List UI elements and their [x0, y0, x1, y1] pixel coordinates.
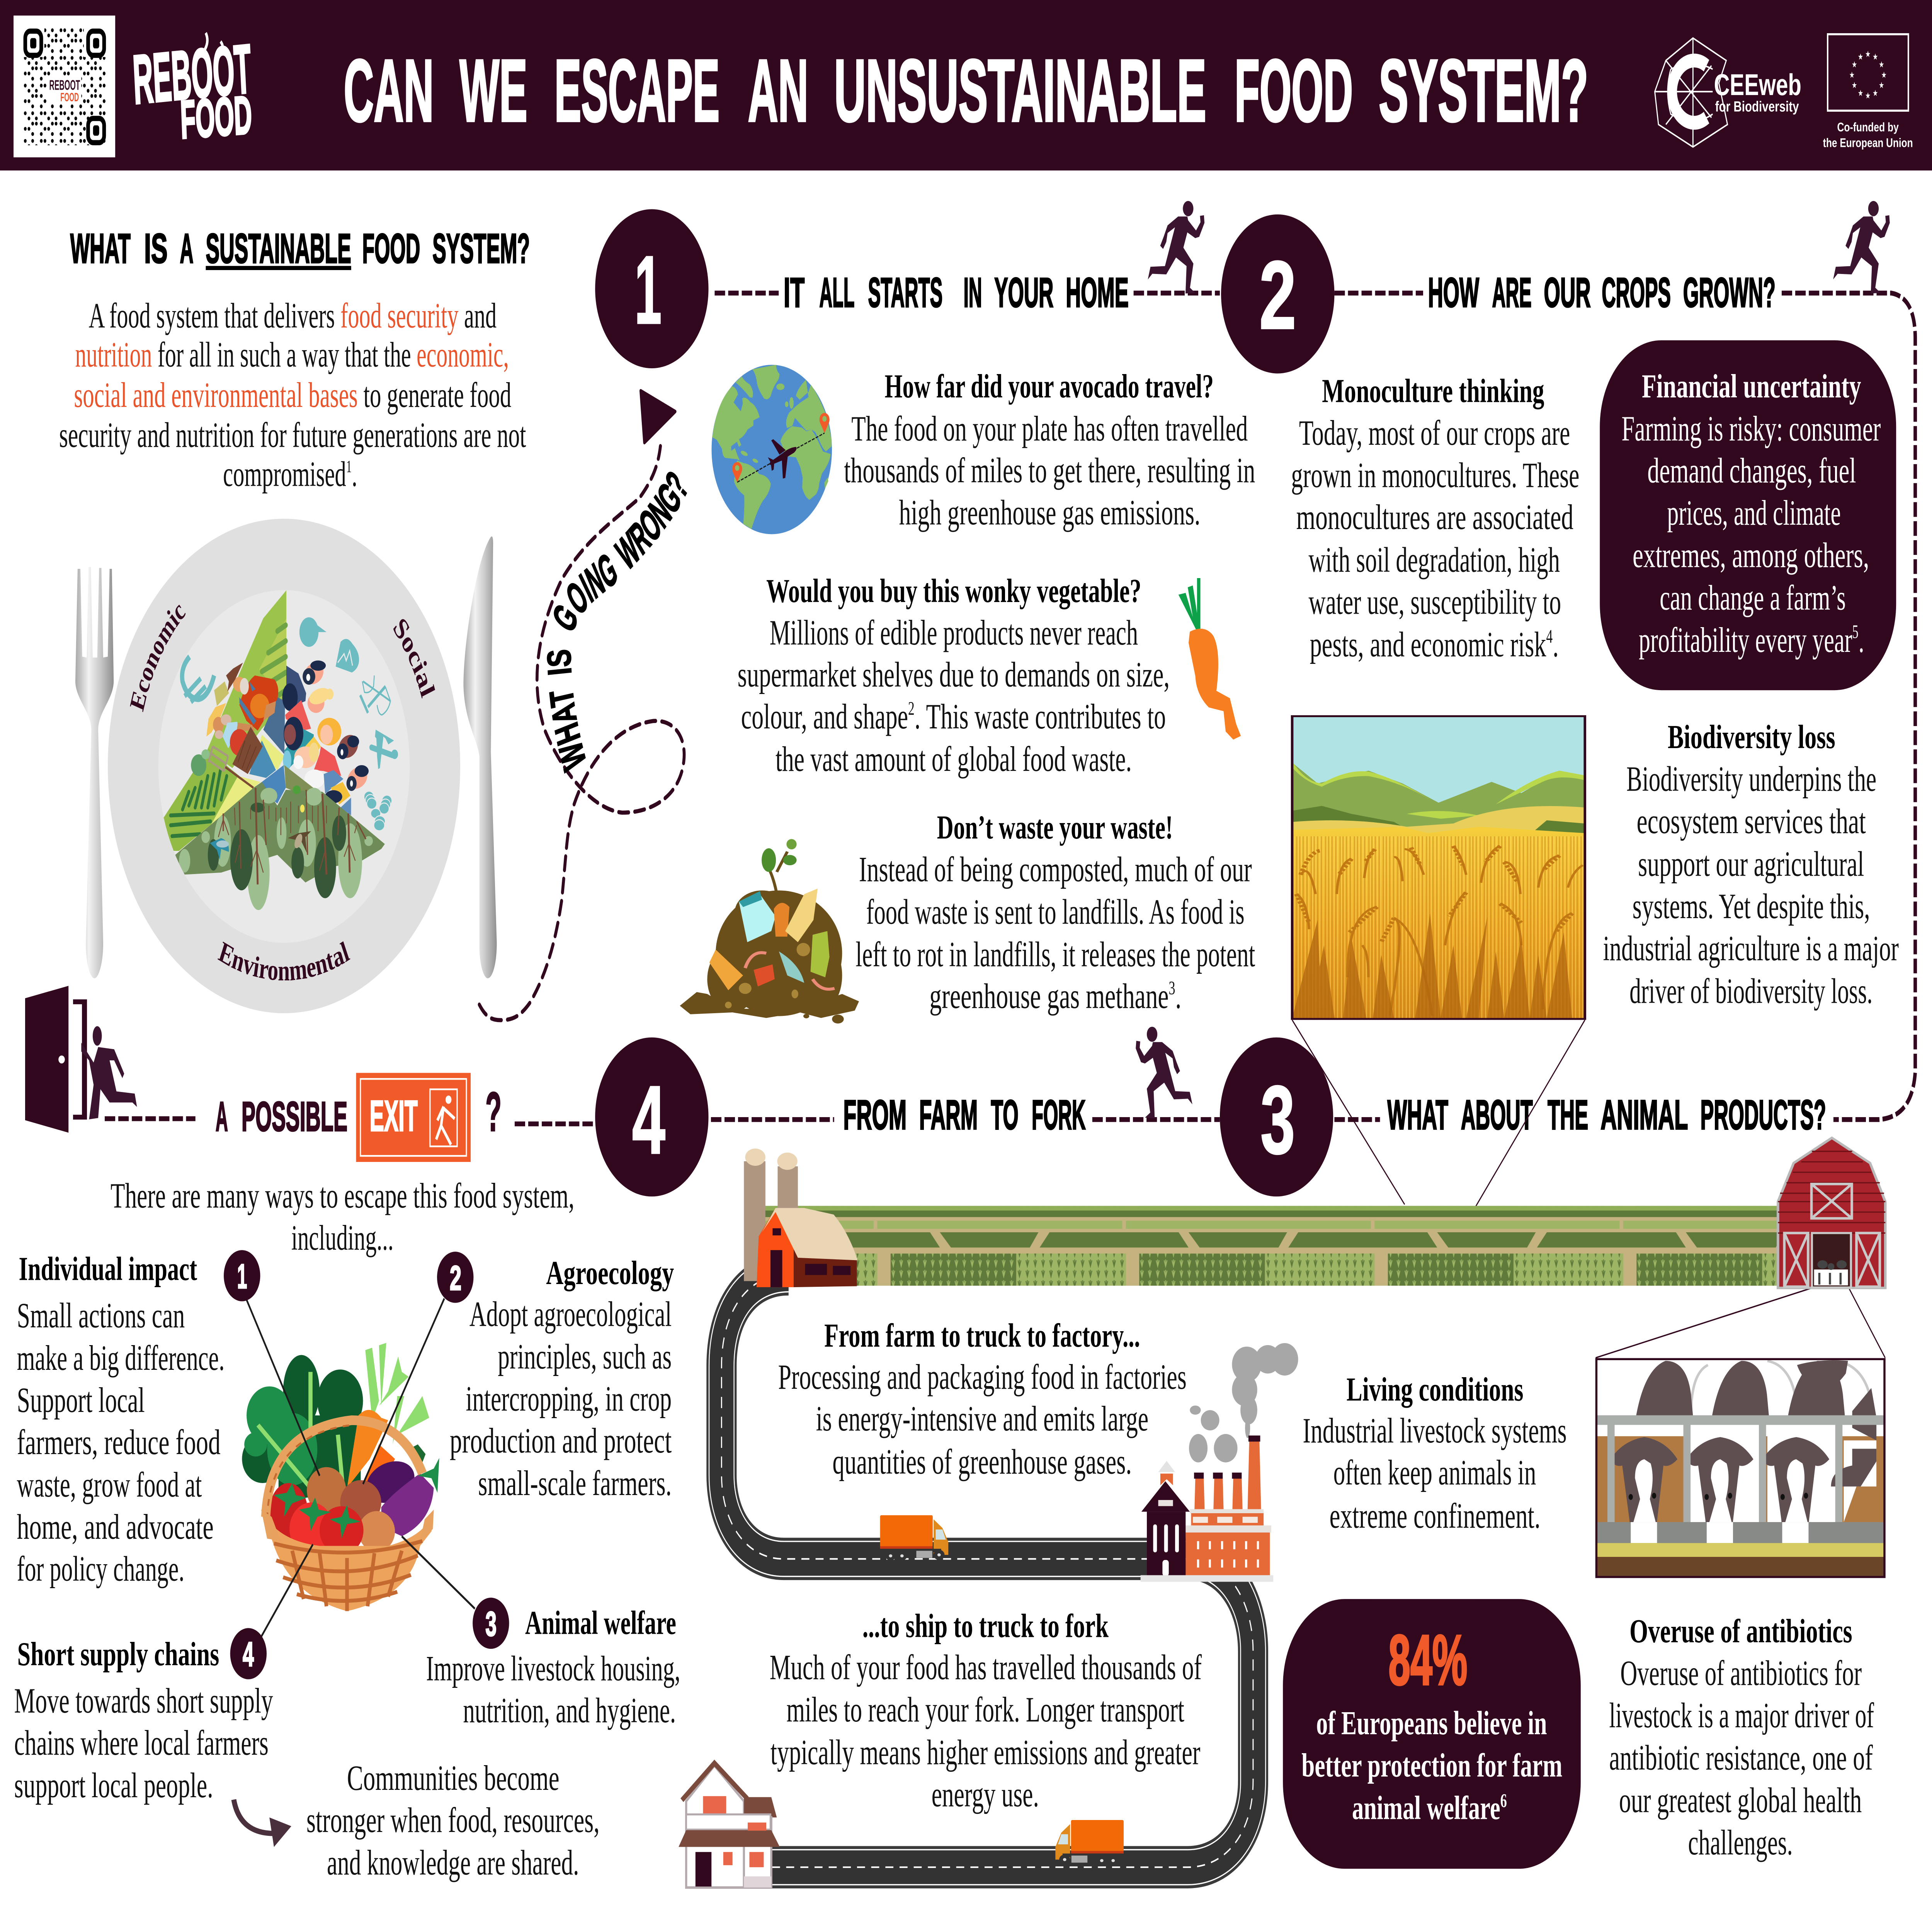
icon: wonky carrot: [1179, 578, 1241, 740]
panel: financial uncertainty: Farming is risky: consumer: [1621, 410, 1881, 449]
panel: 84 percent statistic: [1283, 1599, 1581, 1869]
heading: what about the animal products: PRODUCTS?: [1701, 1092, 1826, 1138]
panel: financial uncertainty: .: [1859, 621, 1864, 660]
exit sign: [356, 1073, 471, 1162]
badge 4: 4: [243, 1635, 254, 1674]
wonky vegetable text block: Millions of edible products never reach: [770, 614, 1138, 653]
living conditions text block: extreme confinement.: [1330, 1497, 1541, 1536]
heading: how are our crops grown: [1428, 270, 1776, 316]
panel: 84 percent statistic: animal welfare: [1352, 1789, 1504, 1827]
badge 2: 2: [450, 1259, 461, 1298]
biodiversity text block: ecosystem services that: [1637, 802, 1866, 841]
waste text block: Instead of being composted, much of our: [859, 850, 1252, 889]
individual impact block: make a big difference.: [17, 1339, 224, 1378]
definition paragraph: security and nutrition for future generations are not: [59, 416, 526, 455]
heading: how are our crops grown: GROWN?: [1683, 270, 1776, 316]
CEEweb logo: CEEweb: [1714, 68, 1801, 102]
illustration: factory: [1141, 1343, 1298, 1582]
heading: a possible exit: POSSIBLE: [242, 1094, 347, 1140]
biodiversity text block: Biodiversity loss: [1668, 718, 1835, 756]
heading: a possible exit: ?: [485, 1081, 502, 1143]
plate with sustainability pillars: Social: [388, 611, 439, 701]
heading: what about the animal products: THE: [1548, 1092, 1588, 1138]
fork: [75, 567, 114, 978]
definition paragraph: nutrition for all in such a way that the economic,: [75, 335, 509, 374]
heading: it all starts in your home: IN: [964, 270, 982, 316]
antibiotics text block: livestock is a major driver of: [1609, 1696, 1874, 1735]
wonky vegetable text block: Would you buy this wonky vegetable?: [766, 572, 1141, 610]
runner three: [1136, 1027, 1192, 1118]
monoculture text block: grown in monocultures. These: [1291, 456, 1579, 495]
step 3 circle: [1220, 1038, 1333, 1196]
ship to truck to fork text block: miles to reach your fork. Longer transport: [786, 1690, 1184, 1730]
biodiversity text block: [1603, 718, 1899, 1011]
Reboot Food logo: [131, 30, 253, 150]
panel: financial uncertainty: Financial uncertainty: [1642, 367, 1861, 405]
badge 4: [230, 1628, 267, 1679]
panel: financial uncertainty: profitability every year: [1639, 621, 1872, 660]
agroecology block: [450, 1254, 674, 1503]
wonky vegetable text block: . This waste contributes to: [915, 697, 1166, 737]
heading: from farm to fork: FORK: [1032, 1092, 1086, 1138]
heading: what about the animal products: WHAT: [1388, 1092, 1448, 1138]
biodiversity text block: Biodiversity underpins the: [1626, 760, 1876, 799]
badge 3: 3: [485, 1605, 497, 1643]
panel: 84 percent statistic: 84%: [1388, 1620, 1468, 1699]
icon: compost heap: [680, 839, 859, 1024]
panel: financial uncertainty: demand changes, fuel: [1647, 451, 1856, 490]
heading: how are our crops grown: CROPS: [1602, 270, 1671, 316]
header banner: [0, 0, 1932, 170]
EU flag and co-funding note: ★: [1865, 49, 1871, 59]
from farm to factory text block: Processing and packaging food in factories: [778, 1357, 1187, 1397]
badge 3: [473, 1598, 509, 1649]
heading: it all starts in your home: IT: [784, 270, 804, 316]
QR code: [14, 15, 115, 157]
title: FOOD: [1235, 41, 1353, 140]
CEEweb logo: for Biodiversity: [1715, 98, 1799, 115]
definition paragraph: 1: [346, 457, 352, 476]
panel: financial uncertainty: extremes, among others,: [1633, 536, 1869, 575]
escape door and runner: [25, 986, 137, 1133]
ship to truck to fork text block: ...to ship to truck to fork: [862, 1607, 1109, 1645]
EU flag and co-funding note: ★: [1881, 70, 1887, 80]
heading: what about the animal products: ANIMAL: [1600, 1092, 1688, 1138]
from farm to factory text block: From farm to truck to factory...: [824, 1317, 1140, 1354]
EU flag and co-funding note: ★: [1865, 90, 1871, 101]
waste text block: food waste is sent to landfills. As food is: [866, 893, 1245, 932]
wonky vegetable text block: [738, 572, 1170, 779]
short supply chains block: [14, 1635, 273, 1805]
biodiversity text block: support our agricultural: [1638, 845, 1864, 884]
EU flag and co-funding note: ★: [1852, 80, 1857, 90]
plate with sustainability pillars: [108, 519, 460, 1013]
badge 1: [224, 1250, 260, 1301]
EU flag and co-funding note: Co-funded by: [1837, 120, 1899, 134]
individual impact block: Small actions can: [17, 1296, 185, 1335]
communities text: stronger when food, resources,: [306, 1801, 600, 1840]
EU flag and co-funding note: ★: [1858, 88, 1863, 98]
road: [721, 1274, 1253, 1867]
animal welfare block: Improve livestock housing,: [426, 1649, 680, 1688]
monoculture text block: 4: [1546, 626, 1553, 647]
individual impact block: farmers, reduce food: [17, 1423, 221, 1462]
exit sign: EXIT: [370, 1092, 418, 1140]
short supply chains block: Move towards short supply: [14, 1681, 273, 1721]
individual impact block: [17, 1250, 224, 1589]
heading: how are our crops grown: OUR: [1544, 270, 1591, 316]
monoculture text block: Monoculture thinking: [1322, 372, 1544, 410]
knife: [463, 536, 497, 978]
panel: financial uncertainty: prices, and climate: [1667, 493, 1841, 533]
waste text block: [855, 809, 1255, 1016]
step 4 circle: 4: [632, 1066, 665, 1174]
dashed arrow: what is going wrong: [479, 391, 695, 1020]
from farm to factory text block: [778, 1317, 1187, 1482]
title: SYSTEM?: [1379, 41, 1588, 140]
escape intro text: There are many ways to escape this food system,: [111, 1176, 575, 1216]
heading: what is a sustainable food system: SUSTAINABLE: [206, 225, 351, 272]
agroecology block: production and protect: [450, 1422, 672, 1461]
living conditions text block: Living conditions: [1347, 1371, 1524, 1408]
avocado text block: high greenhouse gas emissions.: [899, 493, 1201, 532]
ship to truck to fork text block: energy use.: [932, 1775, 1039, 1814]
illustration: cows at feeding rail: [1596, 1359, 1884, 1577]
Reboot Food logo: REBOOT: [131, 30, 253, 118]
avocado text block: [844, 367, 1255, 532]
biodiversity text block: driver of biodiversity loss.: [1629, 972, 1872, 1011]
biodiversity text block: systems. Yet despite this,: [1633, 887, 1870, 926]
monoculture text block: pests, and economic risk: [1310, 625, 1558, 664]
panel: financial uncertainty: can change a farm’s: [1660, 578, 1846, 617]
heading: it all starts in your home: YOUR: [994, 270, 1053, 316]
farmland strip: [764, 1206, 1787, 1286]
monoculture text block: .: [1553, 625, 1559, 664]
waste text block: .: [1175, 977, 1181, 1016]
pillar labels: Economic: [126, 595, 190, 714]
short supply chains block: chains where local farmers: [14, 1723, 269, 1763]
step 4 circle: [595, 1038, 709, 1196]
icon: truck to house: [1055, 1820, 1124, 1865]
communities text: and knowledge are shared.: [327, 1843, 579, 1883]
heading: from farm to fork: [843, 1092, 1086, 1138]
agroecology block: small-scale farmers.: [478, 1464, 672, 1503]
title: [344, 41, 1588, 140]
step 3 circle: 3: [1260, 1066, 1295, 1174]
people: [286, 665, 306, 709]
heading: what is a sustainable food system: WHAT: [70, 225, 131, 272]
definition paragraph: [59, 296, 526, 494]
title: AN: [748, 41, 808, 140]
forest: [262, 765, 286, 804]
living conditions text block: Industrial livestock systems: [1303, 1412, 1567, 1451]
illustration: vegetable basket: [242, 1343, 439, 1611]
escape intro text: including...: [291, 1218, 393, 1258]
wonky vegetable text block: colour, and shape: [741, 697, 917, 737]
arrow to communities: [234, 1800, 291, 1847]
monoculture text block: with soil degradation, high: [1308, 541, 1560, 580]
avocado text block: thousands of miles to get there, resulting in: [844, 451, 1255, 490]
Reboot Food logo: FOOD: [179, 85, 253, 150]
runner two: [1833, 201, 1890, 293]
heading: a possible exit: [216, 1073, 502, 1162]
badge 1: 1: [237, 1257, 247, 1296]
EU flag and co-funding note: ★: [1858, 52, 1863, 62]
animal welfare block: [426, 1604, 680, 1730]
heading: what is a sustainable food system: A: [180, 225, 194, 272]
monoculture text block: Today, most of our crops are: [1299, 413, 1570, 453]
definition paragraph: .: [352, 455, 357, 494]
badge 2: [437, 1252, 473, 1303]
agroecology block: principles, such as: [498, 1337, 672, 1376]
heading: from farm to fork: TO: [991, 1092, 1019, 1138]
farmers: [263, 697, 285, 754]
runner one: [1148, 201, 1204, 293]
wonky vegetable text block: supermarket shelves due to demands on size,: [738, 655, 1170, 694]
EU flag and co-funding note: ★: [1879, 80, 1884, 90]
avocado text block: How far did your avocado travel?: [885, 367, 1214, 405]
heading: a possible exit: A: [216, 1094, 228, 1140]
heading: it all starts in your home: ALL: [820, 270, 854, 316]
EU flag and co-funding note: ★: [1872, 88, 1878, 98]
definition paragraph: compromised: [223, 455, 361, 494]
escape intro text: [111, 1176, 575, 1258]
heading: from farm to fork: FARM: [919, 1092, 978, 1138]
step 1 circle: 1: [634, 236, 662, 344]
definition paragraph: social and environmental bases to generate food: [74, 376, 511, 415]
agroecology block: Adopt agroecological: [469, 1295, 672, 1334]
title: CAN: [344, 41, 434, 140]
illustration: house: [679, 1763, 780, 1888]
heading: it all starts in your home: STARTS: [868, 270, 942, 316]
panel: 84 percent statistic: better protection for farm: [1301, 1747, 1562, 1784]
antibiotics text block: challenges.: [1688, 1823, 1793, 1863]
teal icons: [182, 617, 398, 831]
agroecology block: intercropping, in crop: [466, 1379, 672, 1419]
illustration: wheat field: [1292, 716, 1585, 1019]
ship to truck to fork text block: Much of your food has travelled thousands of: [770, 1648, 1202, 1687]
waste text block: greenhouse gas methane: [929, 977, 1176, 1016]
title: WE: [459, 41, 527, 140]
heading: how are our crops grown: ARE: [1492, 270, 1532, 316]
animal welfare block: Animal welfare: [525, 1604, 676, 1641]
icon: truck to factory: [880, 1515, 948, 1560]
definition paragraph: A food system that delivers food security and: [89, 296, 497, 335]
short supply chains block: support local people.: [14, 1766, 213, 1805]
waste text block: 3: [1169, 978, 1175, 998]
EU flag and co-funding note: ★: [1852, 60, 1857, 70]
monoculture text block: monocultures are associated: [1296, 498, 1573, 537]
individual impact block: Support local: [17, 1381, 145, 1420]
from farm to factory text block: quantities of greenhouse gases.: [832, 1442, 1132, 1482]
panel: financial uncertainty: [1600, 340, 1896, 690]
from farm to factory text block: is energy-intensive and emits large: [816, 1399, 1148, 1439]
individual impact block: home, and advocate: [17, 1507, 214, 1547]
living conditions text block: often keep animals in: [1333, 1453, 1536, 1492]
icon: globe with flight path: [712, 365, 832, 534]
panel: financial uncertainty: 5: [1852, 622, 1859, 643]
EU flag and co-funding note: [1823, 34, 1913, 150]
antibiotics text block: Overuse of antibiotics: [1629, 1613, 1852, 1650]
title: UNSUSTAINABLE: [834, 41, 1206, 140]
monoculture text block: [1291, 372, 1579, 664]
living conditions text block: [1303, 1371, 1567, 1536]
heading: from farm to fork: FROM: [843, 1092, 906, 1138]
biodiversity text block: industrial agriculture is a major: [1603, 929, 1899, 968]
QR code: FOOD: [60, 90, 79, 104]
connector lines: [247, 1298, 475, 1637]
EU flag and co-funding note: ★: [1872, 52, 1878, 62]
EU flag and co-funding note: ★: [1879, 60, 1884, 70]
wonky vegetable text block: the vast amount of global food waste.: [776, 740, 1132, 779]
animal welfare block: nutrition, and hygiene.: [463, 1691, 676, 1730]
ship to truck to fork text block: typically means higher emissions and greater: [770, 1733, 1201, 1772]
communities text: Communities become: [347, 1759, 560, 1798]
waste text block: left to rot in landfills, it releases the potent: [855, 935, 1255, 974]
individual impact block: Individual impact: [19, 1250, 197, 1288]
heading: how are our crops grown: HOW: [1428, 270, 1479, 316]
agroecology block: Agroecology: [546, 1254, 674, 1291]
heading: what is a sustainable food system: FOOD: [362, 225, 420, 272]
antibiotics text block: [1609, 1613, 1874, 1863]
plate illustration: [163, 590, 398, 910]
EU flag and co-funding note: the European Union: [1823, 136, 1913, 150]
monoculture text block: water use, susceptibility to: [1308, 583, 1561, 622]
plate with sustainability pillars: Environmental: [215, 936, 353, 987]
panel: 84 percent statistic: of Europeans believe in: [1316, 1704, 1547, 1742]
QR code: REBOOT: [49, 77, 80, 93]
heading: what is a sustainable food system: SYSTEM?: [432, 225, 530, 272]
step 2 circle: [1221, 214, 1334, 374]
heading: what is a sustainable food system: IS: [144, 225, 168, 272]
heading: what about the animal products: [1388, 1092, 1826, 1138]
ship to truck to fork text block: [770, 1607, 1202, 1814]
individual impact block: waste, grow food at: [17, 1466, 202, 1505]
panel: 84 percent statistic: 6: [1500, 1790, 1507, 1811]
heading: it all starts in your home: [784, 270, 1129, 316]
EU flag and co-funding note: ★: [1849, 70, 1855, 80]
heading: what is a sustainable food system: [70, 225, 530, 272]
short supply chains block: Short supply chains: [17, 1635, 219, 1673]
CEEweb logo: [1655, 38, 1801, 147]
illustration: red barn: [1778, 1138, 1885, 1288]
avocado text block: The food on your plate has often travelled: [851, 410, 1248, 449]
step 2 circle: 2: [1259, 241, 1296, 349]
title: ESCAPE: [554, 41, 719, 140]
timeline dashes: [105, 293, 1915, 1124]
step 1 circle: [595, 209, 709, 368]
wonky vegetable text block: 2: [908, 698, 915, 719]
antibiotics text block: our greatest global health: [1619, 1781, 1862, 1820]
going wrong label: WHAT IS GOING WRONG?: [541, 463, 695, 776]
antibiotics text block: Overuse of antibiotics for: [1620, 1654, 1862, 1693]
heading: it all starts in your home: HOME: [1066, 270, 1129, 316]
communities text: [306, 1759, 600, 1883]
waste text block: Don’t waste your waste!: [937, 809, 1173, 846]
individual impact block: for policy change.: [17, 1550, 184, 1589]
heading: what about the animal products: ABOUT: [1461, 1092, 1533, 1138]
illustration: silos and farmhouse: [744, 1148, 858, 1287]
antibiotics text block: antibiotic resistance, one of: [1609, 1738, 1873, 1778]
